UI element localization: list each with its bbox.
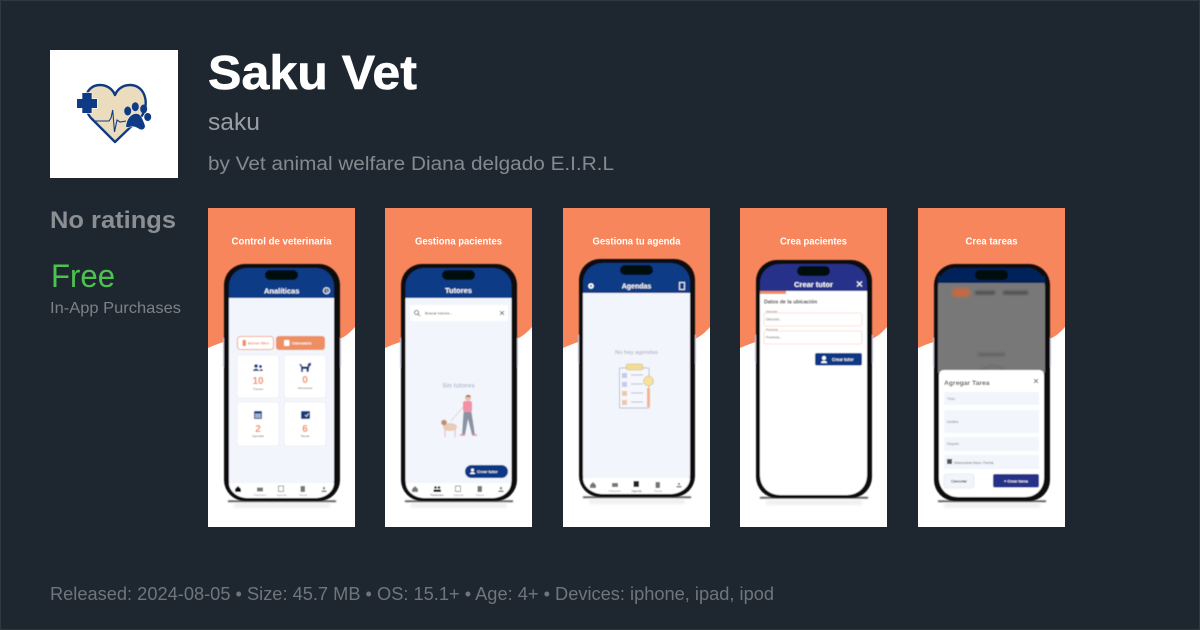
stat cards: Agendas — [252, 434, 264, 438]
form heading: Datos de la ubicación — [764, 300, 817, 306]
form fields: Dirección... — [766, 318, 782, 322]
footer metadata: Released: 2024-08-05 • Size: 45.7 MB • OS: 15.1+ • Age: 4+ • Devices: iphone, ipad, ipod — [50, 584, 774, 604]
stat cards — [237, 355, 326, 446]
tab bar — [229, 483, 334, 498]
in-app purchases: In-App Purchases — [50, 300, 181, 317]
screenshot 5: create task — [918, 208, 1065, 527]
caption: Control de veterinaria — [232, 236, 332, 248]
phone: Tutores — [445, 286, 472, 295]
stat cards: 2 — [255, 424, 261, 435]
bottom sheet: Etiqueta — [947, 442, 959, 446]
tab bar: Tareas — [476, 493, 485, 497]
title: Saku Vet — [208, 47, 417, 100]
bottom sheet: + Crear tarea — [1004, 478, 1029, 484]
screenshot 3: agenda — [563, 208, 710, 527]
blurred background tabs — [952, 288, 1028, 402]
bottom sheet: Cancelar — [951, 480, 968, 484]
illustration: person walking a dog — [441, 395, 477, 437]
stat cards: Atenciones — [298, 386, 313, 390]
bottom sheet: Agregar Tarea — [944, 380, 990, 387]
empty state: Sin tutores — [442, 382, 475, 390]
filter buttons: Borrar filtro — [248, 342, 270, 346]
phone: Crear tutor — [794, 280, 833, 289]
tab bar — [583, 478, 690, 494]
tab bar: Agenda — [631, 489, 642, 493]
developer: by Vet animal welfare Diana delgado E.I.R.L — [208, 154, 614, 175]
bottom sheet — [939, 370, 1044, 497]
filter buttons — [238, 336, 325, 350]
bottom sheet: Título — [947, 397, 955, 401]
stat cards: 6 — [302, 424, 308, 435]
empty state: No hay agendas — [615, 350, 658, 356]
tab bar: Pacientes — [609, 489, 622, 493]
tab bar — [406, 483, 511, 498]
filter buttons: Calendario — [292, 342, 312, 346]
phone — [223, 264, 341, 508]
create button: Crear tutor — [832, 357, 854, 362]
phone — [400, 264, 518, 508]
illustration: clipboard — [620, 364, 654, 408]
caption: Crea pacientes — [780, 236, 847, 248]
bottom sheet: Detalles — [947, 420, 959, 424]
screenshot 2: patients — [385, 208, 532, 527]
form fields: Provincia — [766, 328, 778, 332]
create button — [465, 465, 508, 478]
tab bar: Tareas — [299, 493, 308, 497]
stat cards: 10 — [252, 376, 264, 387]
bottom sheet: Selecciona Hora / Fecha — [954, 461, 993, 465]
tab bar: Agenda — [277, 493, 287, 497]
create button — [815, 353, 862, 366]
form fields — [764, 310, 862, 344]
caption: Crea tareas — [966, 236, 1018, 248]
phone: Analíticas — [264, 286, 299, 296]
tab bar: Tareas — [654, 489, 663, 493]
stat cards: Tutores — [253, 387, 264, 391]
screenshot 4: create patient — [740, 208, 887, 527]
caption: Gestiona pacientes — [415, 236, 502, 248]
rating: No ratings — [50, 207, 176, 234]
phone: Agendas — [622, 284, 651, 290]
create button: Crear tutor — [477, 469, 498, 474]
screenshot 1: analytics — [208, 208, 355, 527]
app icon: heart with cross and paw — [50, 50, 178, 178]
phone — [755, 260, 873, 505]
phone — [578, 259, 696, 504]
tab bar: Pacientes — [430, 493, 444, 497]
tab bar: Agenda — [454, 493, 464, 497]
stat cards: Tareas — [300, 434, 310, 438]
search box: Buscar tutores... — [425, 312, 453, 316]
stat cards: 0 — [302, 375, 308, 386]
tab bar: Pacientes — [254, 493, 267, 497]
caption: Gestiona tu agenda — [592, 236, 681, 248]
subtitle: saku — [208, 109, 260, 136]
form fields: Dirección — [766, 310, 778, 314]
price: Free — [51, 258, 115, 294]
search box — [410, 305, 508, 321]
phone — [933, 264, 1051, 508]
form fields: Provincia... — [766, 336, 782, 340]
